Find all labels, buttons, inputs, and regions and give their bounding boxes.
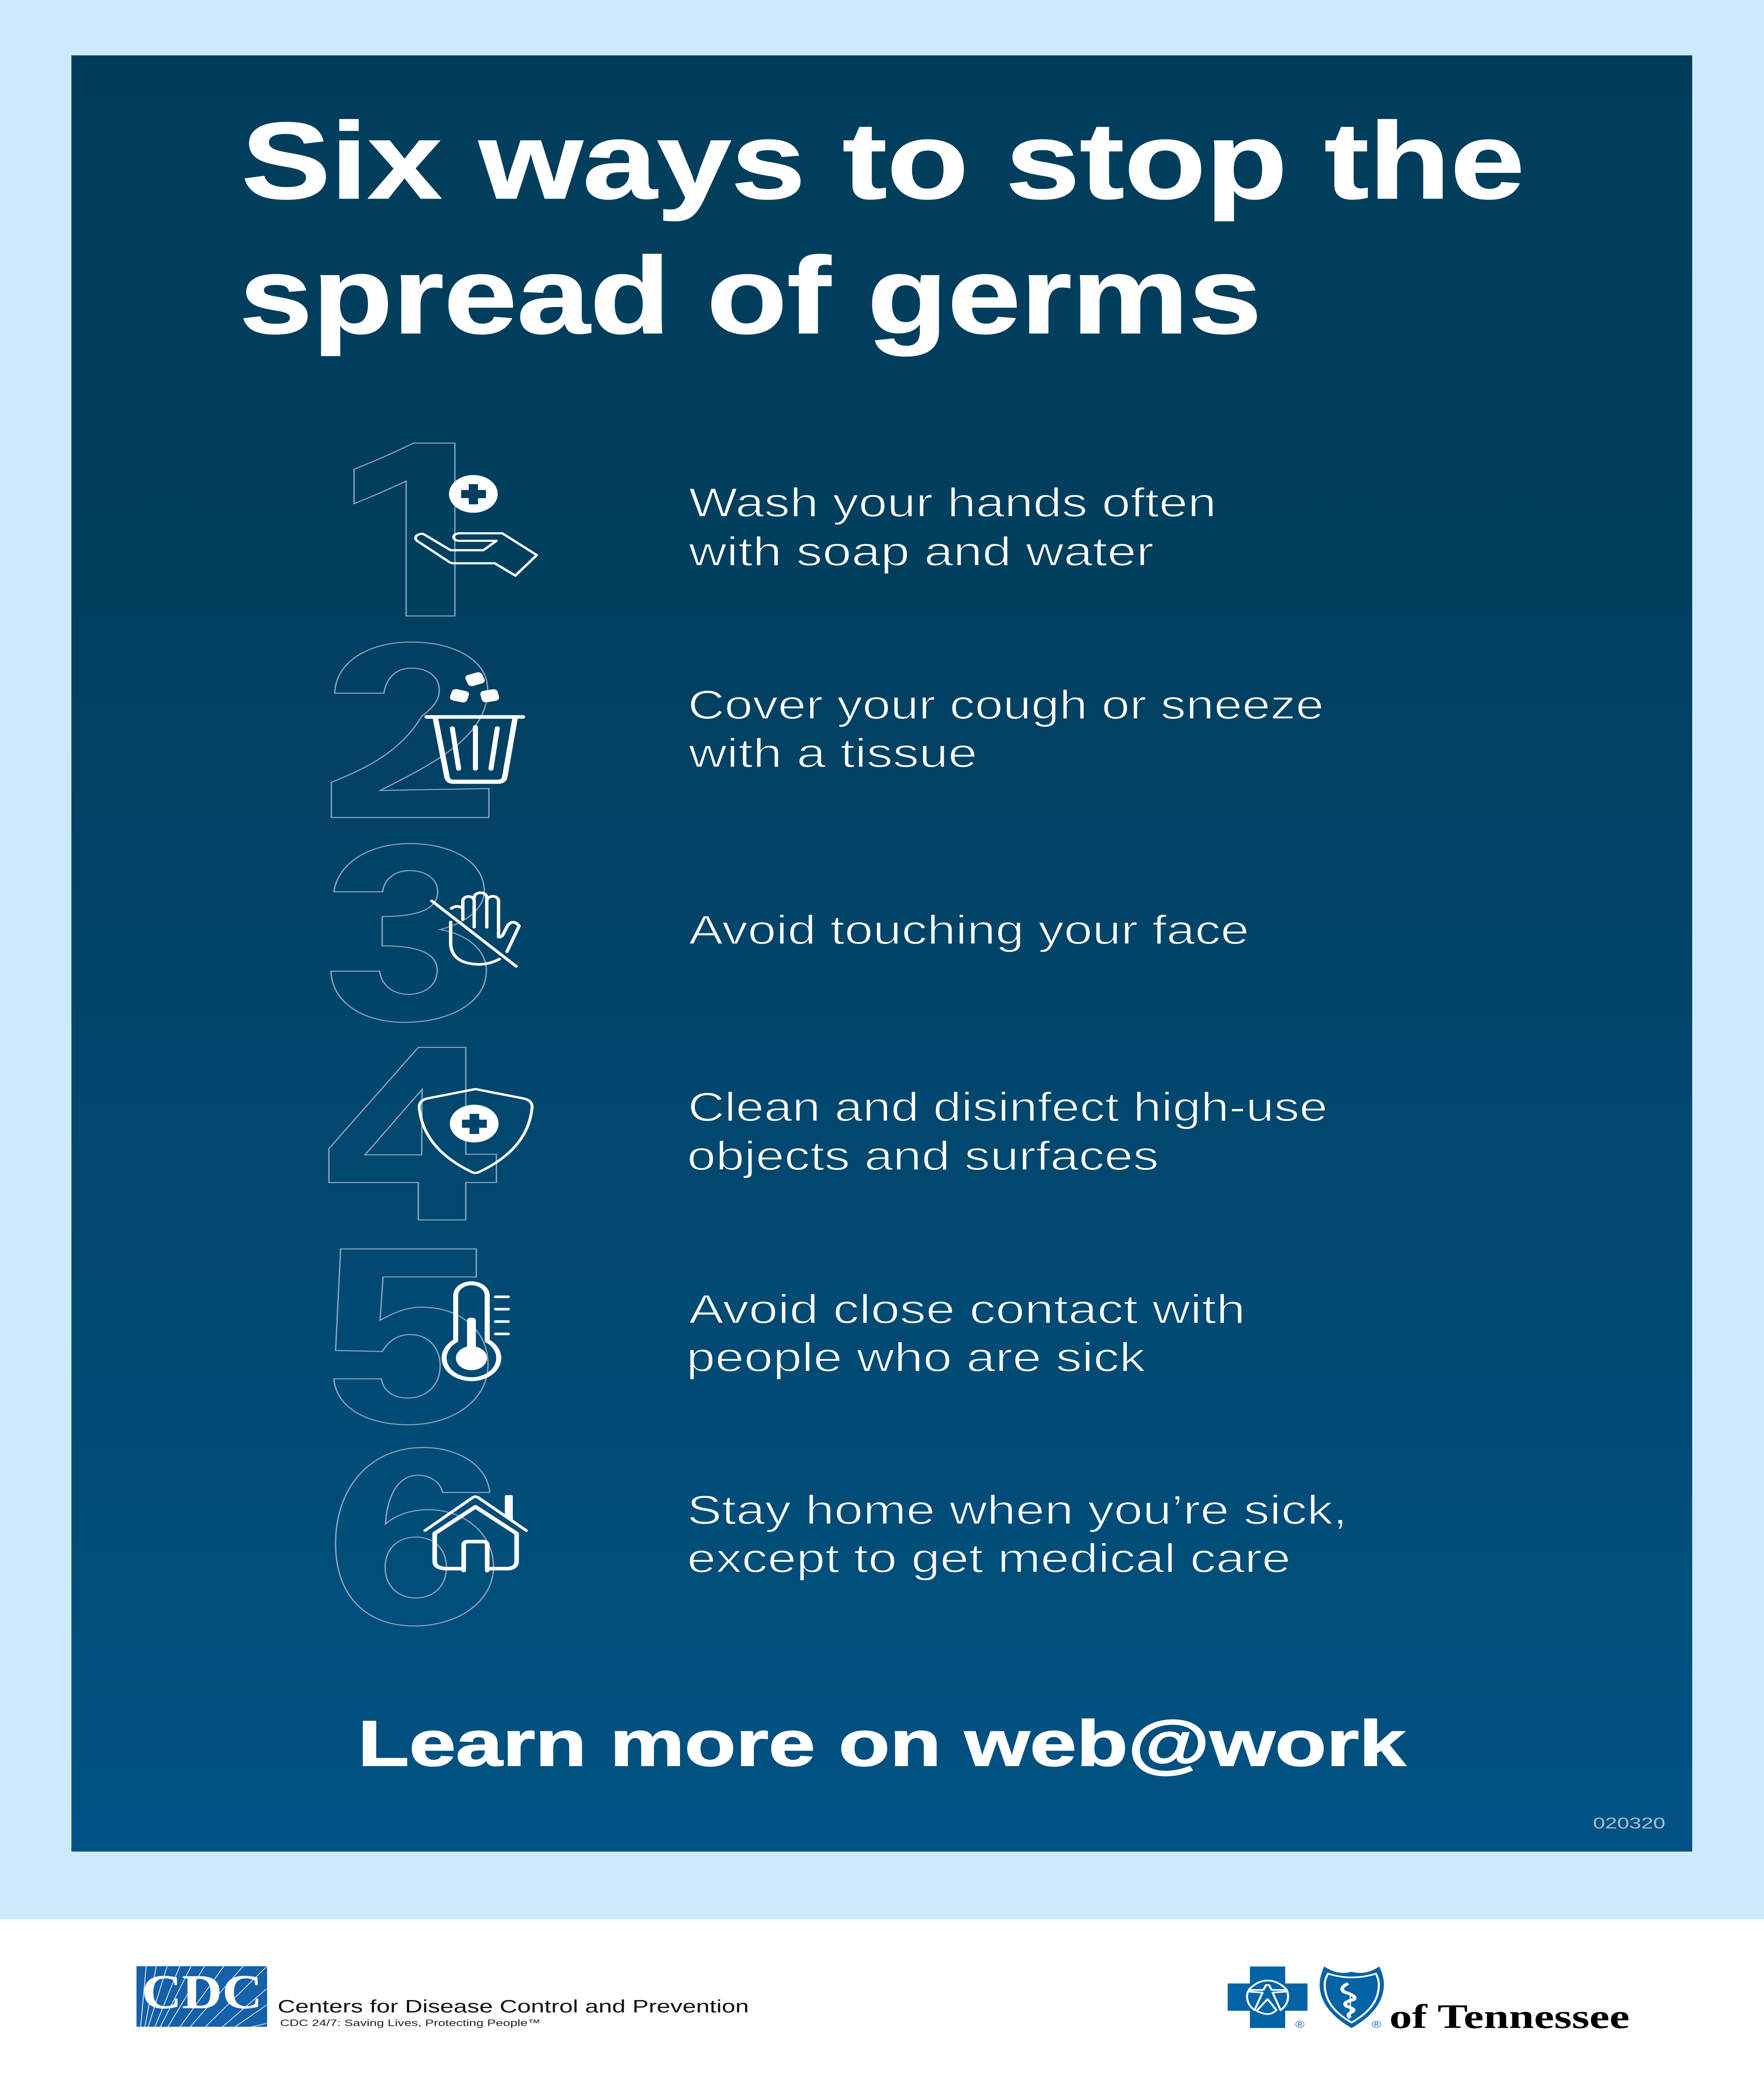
numeral 3 outline [331, 844, 486, 1022]
numeral 1 outline [354, 443, 455, 616]
step 1 text [688, 480, 1216, 574]
title: spread of germs [239, 235, 1262, 357]
step 5 text [686, 1286, 1245, 1380]
main dark blue panel [71, 55, 1692, 1852]
step 5 text: Avoid close contact with [689, 1286, 1245, 1332]
step 1: wash hands [354, 443, 1216, 616]
icon: blue shield [1320, 1966, 1384, 2030]
step 2 text [688, 682, 1324, 776]
step 4 text: Clean and disinfect high-use [688, 1084, 1328, 1130]
icon: house [425, 1495, 526, 1571]
CDC blue square: CDC [142, 1965, 262, 2019]
document code: 020320 [1593, 1815, 1665, 1832]
step 6 text: except to get medical care [687, 1535, 1291, 1581]
icon: thermometer [444, 1283, 508, 1379]
numeral 5 outline [334, 1249, 488, 1425]
step 1 text: with soap and water [688, 528, 1154, 574]
icon: blue cross [1228, 1966, 1307, 2030]
call to action: Learn more on web@work [358, 1707, 1406, 1780]
step 3 text: Avoid touching your face [689, 907, 1249, 953]
numeral 6 outline [336, 1448, 494, 1626]
step 6 text [687, 1487, 1347, 1581]
CDC tagline: CDC 24/7: Saving Lives, Protecting People™ [280, 2018, 541, 2028]
icon: hand with soap [415, 475, 537, 576]
numeral 4 outline [329, 1047, 496, 1220]
CDC logo [136, 1965, 749, 2028]
Blue Cross Blue Shield logo [1228, 1966, 1630, 2036]
icon: shield with cross [419, 1089, 532, 1173]
Tennessee wordmark: of Tennessee [1389, 1998, 1630, 2036]
white footer band [0, 1919, 1764, 2100]
title: Six ways to stop the [242, 100, 1525, 222]
step 2 text: with a tissue [688, 730, 977, 776]
step 4: clean and disinfect [329, 1047, 1328, 1220]
step 2: cover cough [331, 642, 1324, 818]
title [239, 100, 1525, 357]
numeral 2 outline [331, 642, 489, 818]
icon: blue shield: ® [1372, 2019, 1381, 2030]
icon: blue cross: ® [1295, 2019, 1305, 2030]
step 5 text: people who are sick [686, 1334, 1146, 1380]
step 5: avoid close contact [334, 1249, 1245, 1425]
step 4 text: objects and surfaces [687, 1133, 1159, 1179]
step 4 text [687, 1084, 1328, 1179]
icon: tissue basket [427, 671, 523, 782]
step 6 text: Stay home when you’re sick, [687, 1487, 1347, 1533]
step 1 text: Wash your hands often [689, 480, 1216, 525]
step 3: avoid touching face [331, 844, 1249, 1022]
icon: hand with slash [432, 893, 519, 966]
CDC name: Centers for Disease Control and Prevention [278, 1996, 749, 2016]
step 6: stay home [336, 1448, 1347, 1626]
step 2 text: Cover your cough or sneeze [688, 682, 1324, 727]
